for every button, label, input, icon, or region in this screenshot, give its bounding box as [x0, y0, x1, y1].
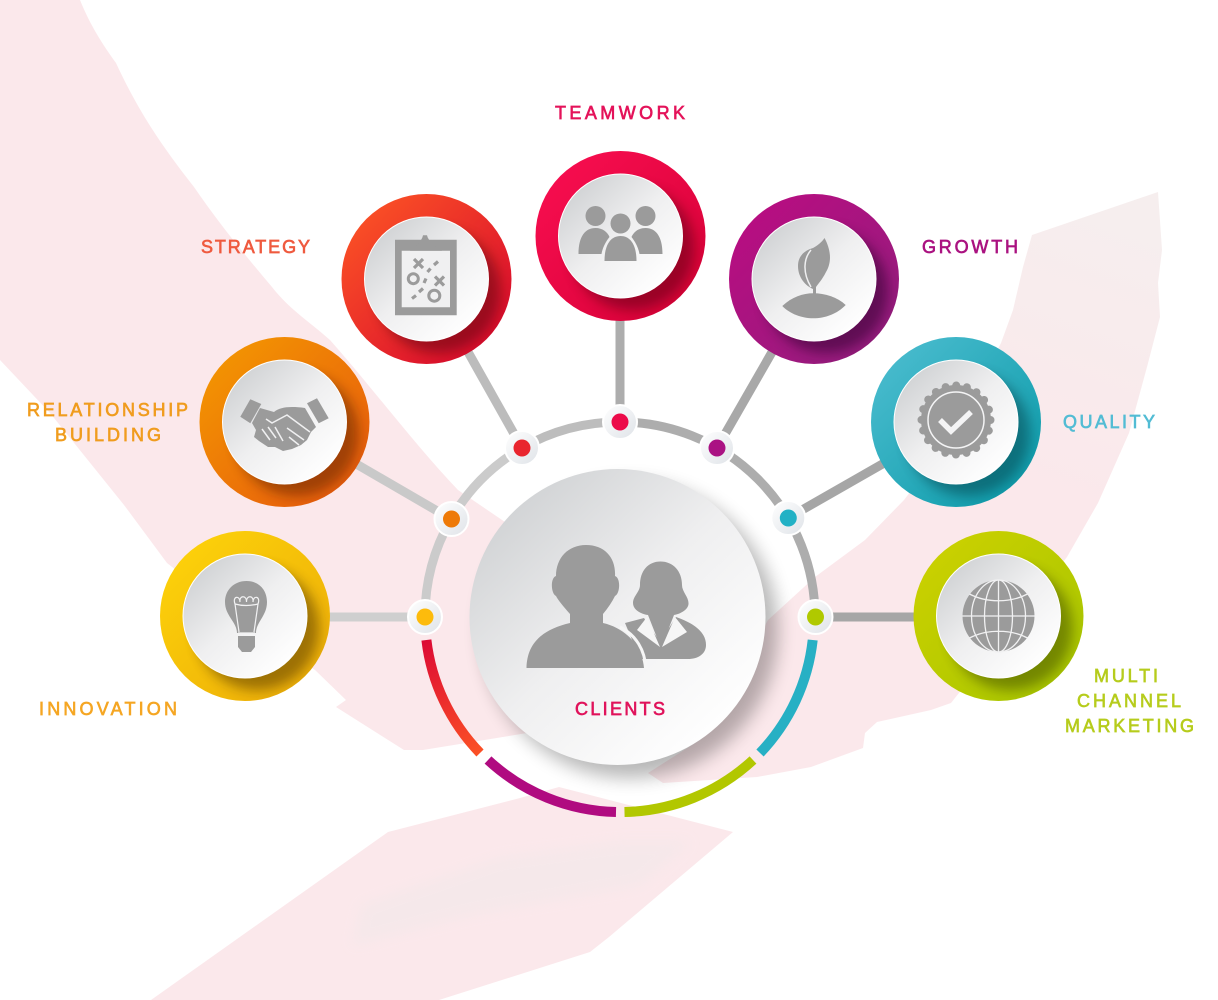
label: innovation: INNOVATION: [39, 699, 177, 719]
icon: handshake: [240, 398, 329, 451]
circle: relationship building: [200, 337, 370, 507]
node: strategy: [505, 431, 539, 465]
icon: globe: [962, 580, 1034, 652]
label: relationship building: BUILDING: [55, 425, 161, 445]
node: growth: [700, 431, 734, 465]
label: teamwork: TEAMWORK: [555, 103, 685, 123]
circle: multi channel marketing: [914, 531, 1084, 701]
label: quality: QUALITY: [1063, 412, 1155, 432]
outer ring: coloured lower arcs: [426, 640, 813, 812]
label: relationship building: RELATIONSHIP: [27, 400, 188, 420]
circle: quality: [871, 337, 1041, 507]
icon: team: [578, 206, 662, 261]
icon: light bulb: [225, 581, 267, 652]
circle: teamwork: [536, 151, 706, 321]
connector spokes: [245, 236, 998, 617]
node: relationship building: [434, 502, 468, 536]
central disc: clients: [470, 469, 778, 778]
label: clients: CLIENTS: [575, 699, 665, 719]
circle: strategy: [342, 194, 512, 364]
circle: growth: [729, 194, 899, 364]
icon: clipboard plan: [395, 235, 457, 315]
node: teamwork: [603, 405, 637, 439]
outer ring: grey upper arc: [425, 422, 815, 617]
label: multi channel marketing: MARKETING: [1065, 716, 1194, 736]
icon: clients: [526, 545, 706, 669]
label: multi channel marketing: CHANNEL: [1077, 691, 1181, 711]
icon: quality badge: [921, 385, 991, 455]
node: quality: [771, 501, 805, 535]
label: multi channel marketing: MULTI: [1094, 666, 1158, 686]
node: innovation: [408, 600, 442, 634]
label: relationship building: [27, 400, 188, 445]
icon: sprout: [782, 238, 846, 318]
label: growth: GROWTH: [922, 237, 1018, 257]
circle: innovation: [160, 531, 330, 701]
label: strategy: STRATEGY: [201, 237, 310, 257]
node: multi channel marketing: [798, 600, 832, 634]
label: multi channel marketing: [1065, 666, 1194, 736]
